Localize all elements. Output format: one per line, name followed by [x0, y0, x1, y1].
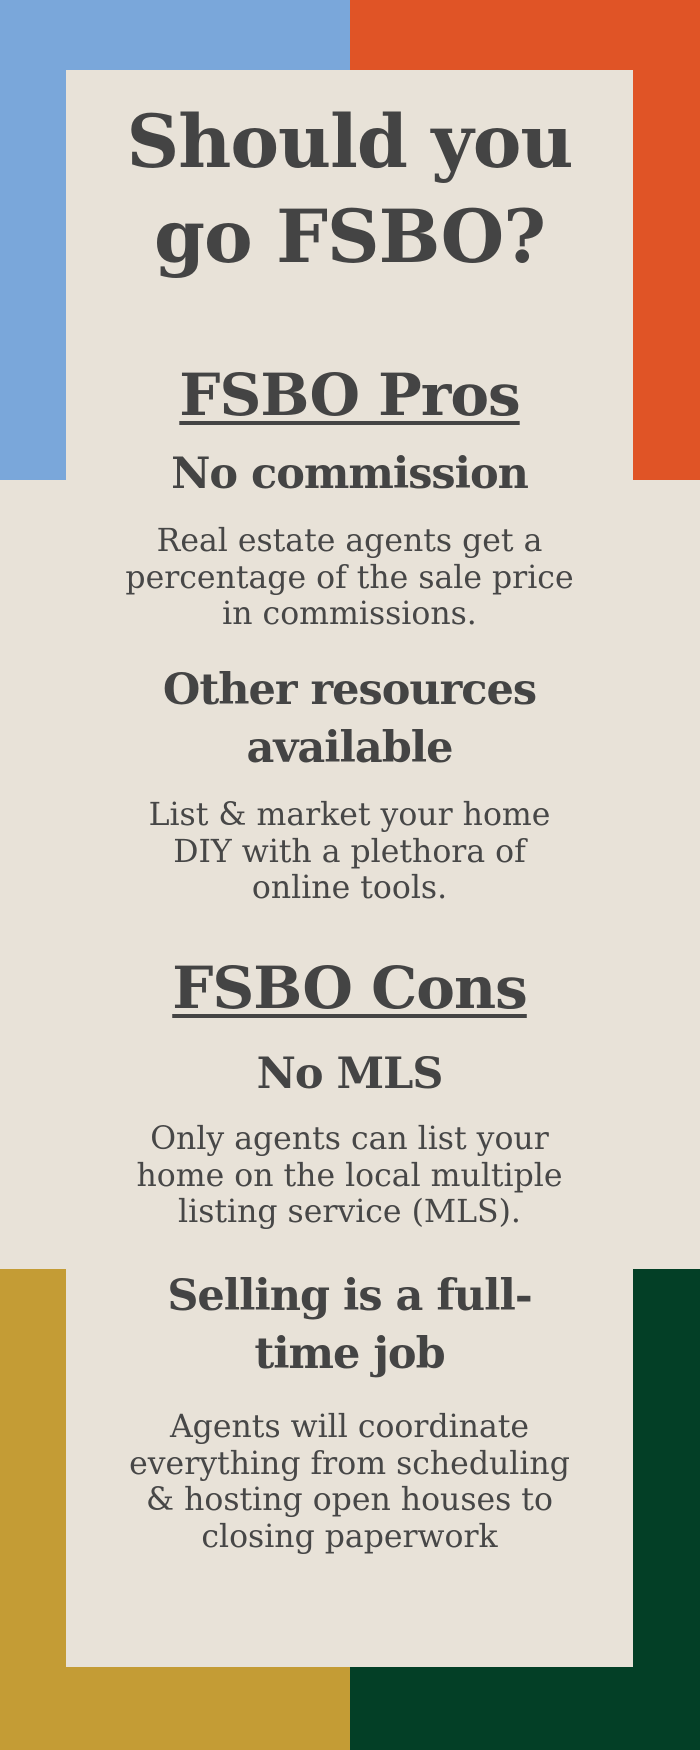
title: Should you [127, 99, 572, 185]
background: orange quadrant [350, 0, 700, 480]
background: green quadrant [350, 1269, 700, 1750]
text: resources description: DIY with a plethora of [173, 834, 526, 870]
text: full-time job description: closing paperwork [201, 1518, 498, 1554]
subheading: Other resources available: Other resources [163, 665, 536, 715]
text: MLS description [136, 1121, 563, 1230]
background: blue quadrant [0, 0, 350, 480]
heading: FSBO Cons: FSBO Cons [172, 954, 527, 1022]
title [127, 99, 572, 280]
text: resources description [149, 797, 550, 906]
title: go FSBO? [154, 194, 545, 280]
text: full-time job description: everything from scheduling [129, 1446, 570, 1482]
text: full-time job description: Agents will coordinate [170, 1409, 529, 1445]
subheading: Selling is a full-time job [167, 1271, 532, 1379]
subheading: No MLS: No MLS [257, 1049, 442, 1099]
subheading: Other resources available [163, 665, 536, 773]
text: MLS description: home on the local multiple [136, 1158, 563, 1194]
subheading: Selling is a full-time job: time job [254, 1329, 445, 1379]
text: commission description [125, 523, 574, 632]
text: commission description: in commissions. [222, 596, 477, 632]
text: full-time job description [129, 1409, 570, 1554]
text: resources description: List & market your home [149, 797, 550, 833]
text: full-time job description: & hosting open houses to [146, 1482, 553, 1518]
panel: main content [66, 70, 633, 1667]
text: commission description: percentage of the sale price [125, 560, 574, 596]
text: MLS description: Only agents can list your [150, 1121, 549, 1157]
text: commission description: Real estate agents get a [157, 523, 542, 559]
text: MLS description: listing service (MLS). [178, 1194, 521, 1230]
text: resources description: online tools. [252, 870, 447, 906]
subheading: No commission: No commission [171, 449, 528, 499]
subheading: Selling is a full-time job: Selling is a full- [167, 1271, 532, 1321]
background: mustard quadrant [0, 1269, 350, 1750]
heading: FSBO Pros: FSBO Pros [179, 361, 520, 429]
subheading: Other resources available: available [246, 723, 452, 773]
